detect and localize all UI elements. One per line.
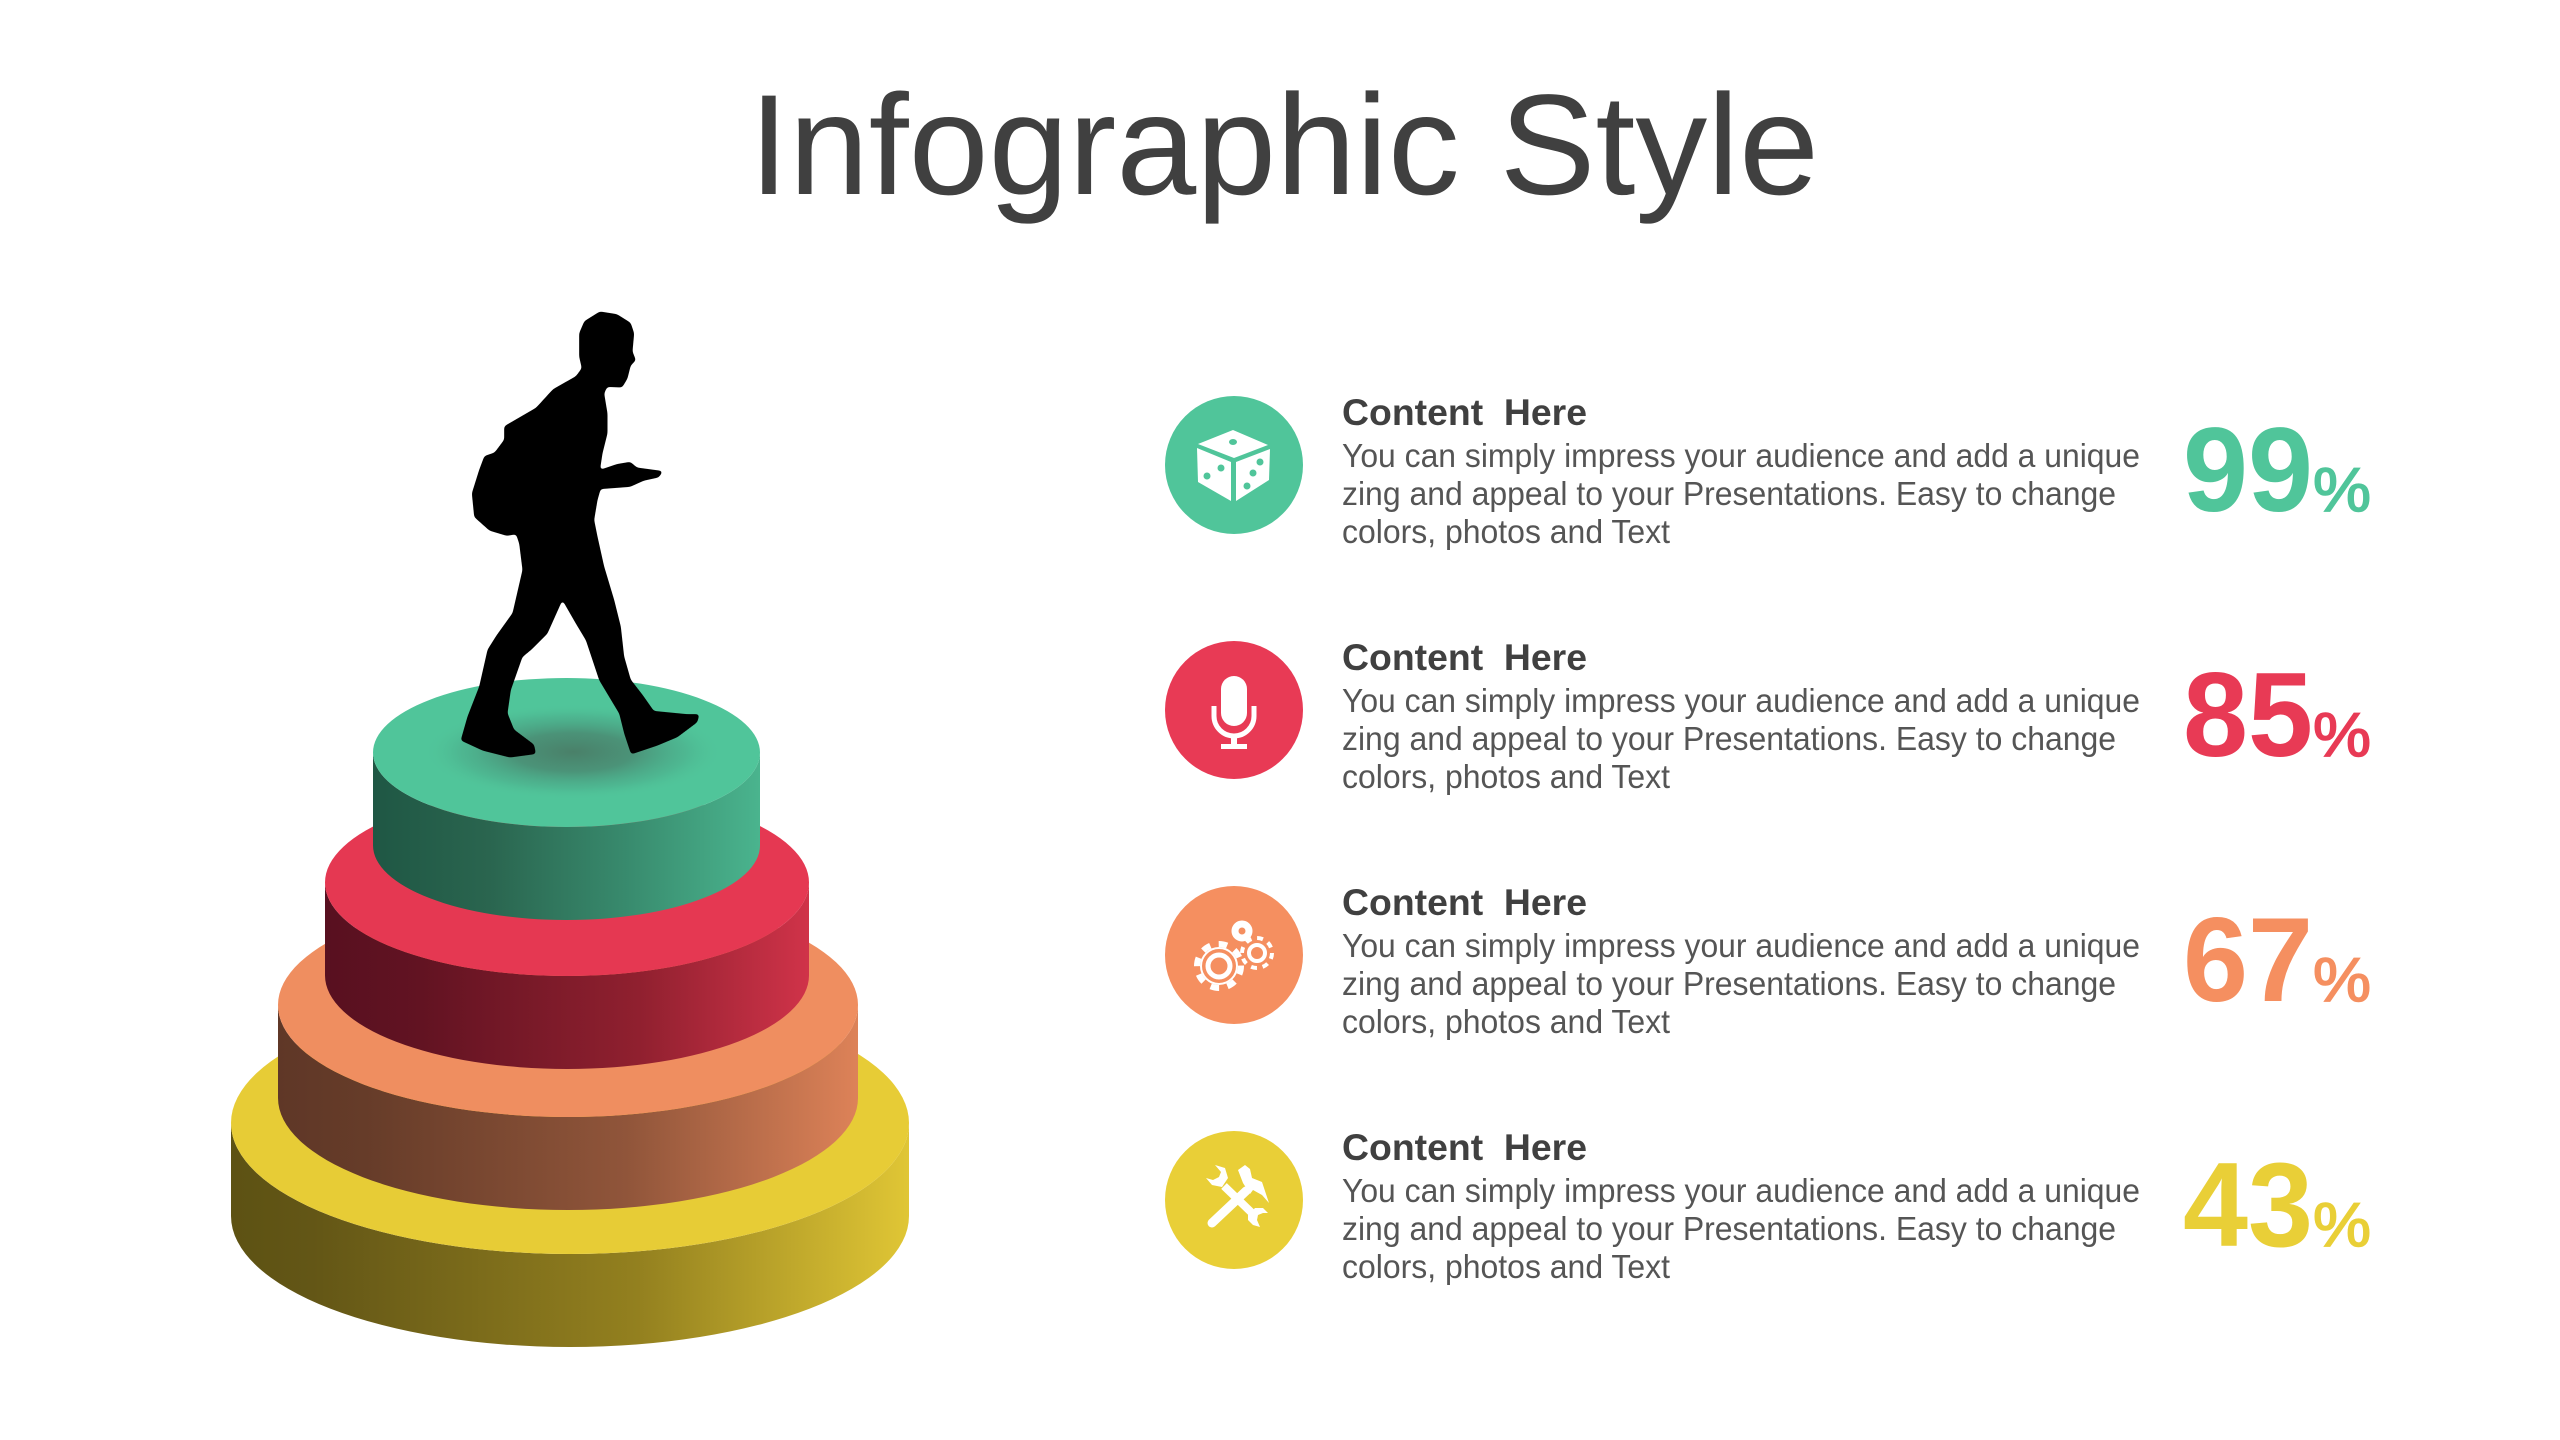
percentage: 43 (2183, 1138, 2313, 1272)
stacked cylinder pyramid (231, 678, 909, 1347)
body text: zing and appeal to your Presentations. Easy to change (1342, 1210, 2116, 1247)
body text: zing and appeal to your Presentations. Easy to change (1342, 720, 2116, 757)
percentage: % (2313, 456, 2371, 525)
row 3: orange 67% (1165, 882, 2371, 1040)
heading: Content Here (1342, 882, 1587, 923)
body text: You can simply impress your audience and add a unique (1342, 437, 2140, 474)
icon: gears (1165, 886, 1303, 1024)
percentage: % (2313, 1191, 2371, 1260)
icon: microphone (1165, 641, 1303, 779)
row 4: yellow 43% (1165, 1127, 2371, 1285)
body text: colors, photos and Text (1342, 513, 1670, 550)
heading: Content Here (1342, 637, 1587, 678)
percentage: % (2313, 946, 2371, 1015)
percentage: % (2313, 701, 2371, 770)
body text: colors, photos and Text (1342, 758, 1670, 795)
percentage: 67 (2183, 893, 2313, 1027)
heading: Content Here (1342, 1127, 1587, 1168)
walker shadow (423, 704, 723, 800)
row 1: green 99% (1165, 392, 2371, 550)
body text: You can simply impress your audience and add a unique (1342, 682, 2140, 719)
tier: yellow base (231, 992, 909, 1347)
body text: zing and appeal to your Presentations. Easy to change (1342, 965, 2116, 1002)
percentage: 85 (2183, 648, 2313, 782)
icon: walking silhouette with backpack (462, 312, 698, 757)
title: Infographic Style (749, 66, 1819, 225)
tier: orange (278, 893, 858, 1210)
body text: You can simply impress your audience and add a unique (1342, 927, 2140, 964)
body text: colors, photos and Text (1342, 1003, 1670, 1040)
tier: red (325, 789, 809, 1069)
icon: wrench and hammer (1165, 1131, 1303, 1269)
body text (1342, 927, 2140, 1040)
icon: dice (1165, 396, 1303, 534)
body text: You can simply impress your audience and add a unique (1342, 1172, 2140, 1209)
percentage: 99 (2183, 403, 2313, 537)
body text (1342, 682, 2140, 795)
heading: Content Here (1342, 392, 1587, 433)
row 2: red 85% (1165, 637, 2371, 795)
body text: colors, photos and Text (1342, 1248, 1670, 1285)
body text (1342, 1172, 2140, 1285)
body text: zing and appeal to your Presentations. Easy to change (1342, 475, 2116, 512)
body text (1342, 437, 2140, 550)
tier: green top (373, 678, 760, 920)
